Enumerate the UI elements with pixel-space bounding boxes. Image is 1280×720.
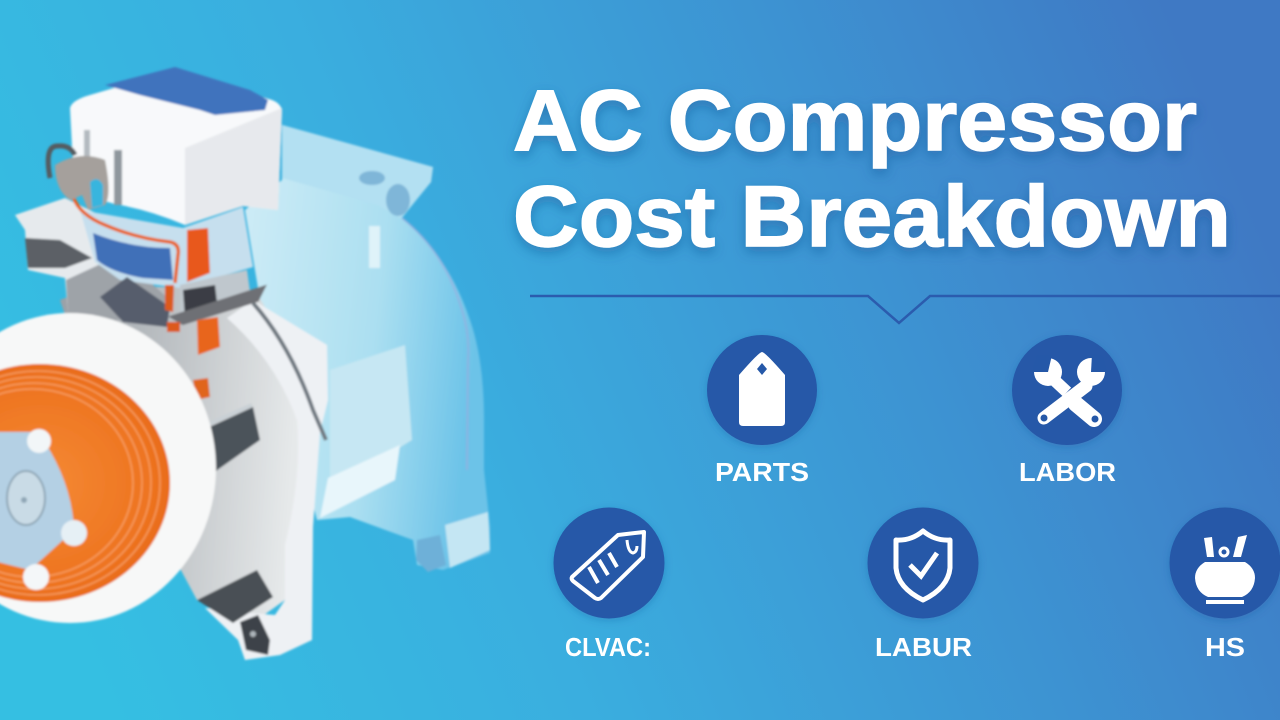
illustration: AC compressor cutaway (0, 67, 490, 660)
icon item: labur (868, 508, 978, 662)
label: parts: PARTS (715, 457, 809, 487)
label: labur: LABUR (875, 632, 972, 662)
cutaway: internals (73, 197, 263, 400)
white clutch disc (0, 313, 216, 623)
orange pulley (0, 364, 170, 602)
left bracket (15, 198, 170, 330)
icon item: parts (707, 335, 817, 487)
icon item: clvac (554, 508, 664, 662)
hub and bolts (0, 429, 87, 590)
icon item: hs (1170, 508, 1280, 662)
icon item: labor (1012, 335, 1122, 487)
connector clip (48, 146, 108, 210)
icon: shield with check (868, 508, 978, 618)
white flange band (205, 300, 328, 660)
label: clvac: CLVAC: (565, 632, 651, 662)
title: AC Compressor (513, 73, 1197, 169)
icon: angled tag (554, 508, 664, 618)
metal mid housing (60, 285, 328, 660)
translucent rear housing (245, 125, 490, 572)
divider with notch (530, 296, 1280, 323)
icon: crossed wrenches (1012, 335, 1122, 445)
icon: pot with tools (1170, 508, 1280, 618)
title (513, 73, 1231, 265)
icon: price tag (707, 335, 817, 445)
label: labor: LABOR (1019, 457, 1116, 487)
top terminal box (70, 67, 282, 225)
label: hs: HS (1205, 632, 1245, 662)
title: Cost Breakdown (513, 169, 1231, 265)
